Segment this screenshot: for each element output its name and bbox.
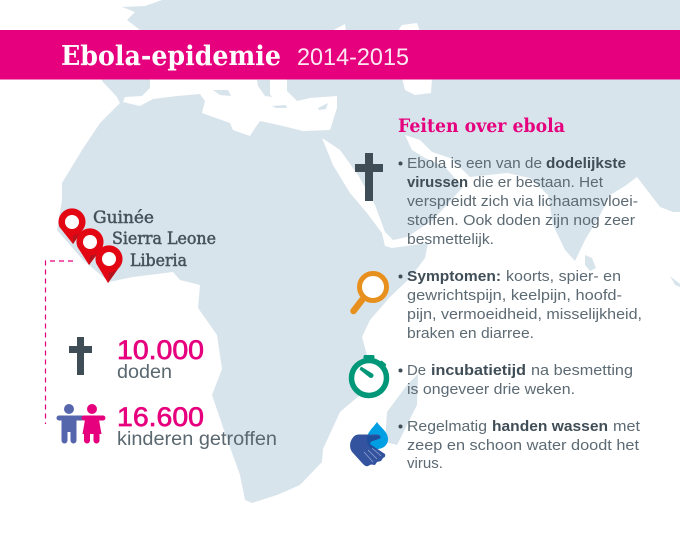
statistic: deaths xyxy=(117,335,204,383)
country labels: Liberia xyxy=(130,251,187,270)
icon: cross xyxy=(355,153,383,201)
fact: symptoms: koorts, spier- en xyxy=(506,268,621,285)
fact: incubation: is ongeveer drie weken. xyxy=(407,381,575,398)
country labels: Guinée xyxy=(93,208,154,227)
fact: incubation: De xyxy=(407,362,426,379)
icon: children xyxy=(59,404,103,440)
fact: hand washing: zeep en schoon water doodt het xyxy=(407,437,640,454)
fact: deadly virus xyxy=(398,155,638,248)
fact: hand washing: met xyxy=(613,418,641,435)
fact: incubation: na besmetting xyxy=(531,362,633,379)
icon: washing hands xyxy=(350,422,388,466)
fact: deadly virus: Ebola is een van de xyxy=(407,155,542,172)
icon: magnifier xyxy=(354,274,386,311)
fact: symptoms: braken en diarree. xyxy=(407,325,534,342)
fact: incubation xyxy=(398,362,633,398)
statistic: children xyxy=(117,402,277,450)
icon: cross deaths xyxy=(69,337,92,375)
title: Ebola-epidemie xyxy=(61,41,281,72)
fact: deadly virus: stoffen. Ook doden zijn nog zeer xyxy=(407,212,635,229)
heading: facts: Feiten over ebola xyxy=(398,115,565,137)
fact: deadly virus: die er bestaan. Het xyxy=(473,174,604,191)
subtitle years: 2014-2015 xyxy=(297,44,409,71)
fact: symptoms: Symptomen: xyxy=(407,268,501,285)
fact: symptoms xyxy=(398,268,642,342)
fact: hand washing: handen wassen xyxy=(492,418,608,435)
country labels: Sierra Leone xyxy=(112,229,216,248)
statistic: children: kinderen getroffen xyxy=(117,429,277,450)
fact: deadly virus: besmettelijk. xyxy=(407,231,494,248)
Sumatra fragment xyxy=(670,276,680,287)
fact: deadly virus: virussen xyxy=(407,174,468,191)
dashed connector xyxy=(46,261,73,424)
pin: Guinée xyxy=(58,208,85,244)
country labels xyxy=(93,208,216,270)
fact: symptoms: pijn, vermoeidheid, misselijkheid, xyxy=(407,306,642,323)
banner xyxy=(0,30,680,80)
statistic: deaths: doden xyxy=(117,362,172,383)
map pins: affected countries xyxy=(58,208,123,283)
fact: deadly virus: verspreidt zich via lichaamsvloei- xyxy=(407,193,638,210)
fact: hand washing: Regelmatig xyxy=(407,418,487,435)
fact: deadly virus: dodelijkste xyxy=(546,155,626,172)
statistic: deaths: 10.000 xyxy=(117,335,204,365)
fact: incubation: incubatietijd xyxy=(431,362,526,379)
fact: hand washing xyxy=(398,418,641,472)
fact: hand washing: virus. xyxy=(407,455,443,472)
pin: Liberia xyxy=(95,245,123,283)
icon: stopwatch xyxy=(352,355,387,396)
fact: symptoms: gewrichtspijn, keelpijn, hoofd- xyxy=(407,287,622,304)
statistic: children: 16.600 xyxy=(117,402,204,432)
Madagascar xyxy=(385,374,418,445)
pin: Sierra Leone xyxy=(77,228,103,265)
Sri Lanka xyxy=(585,255,596,271)
